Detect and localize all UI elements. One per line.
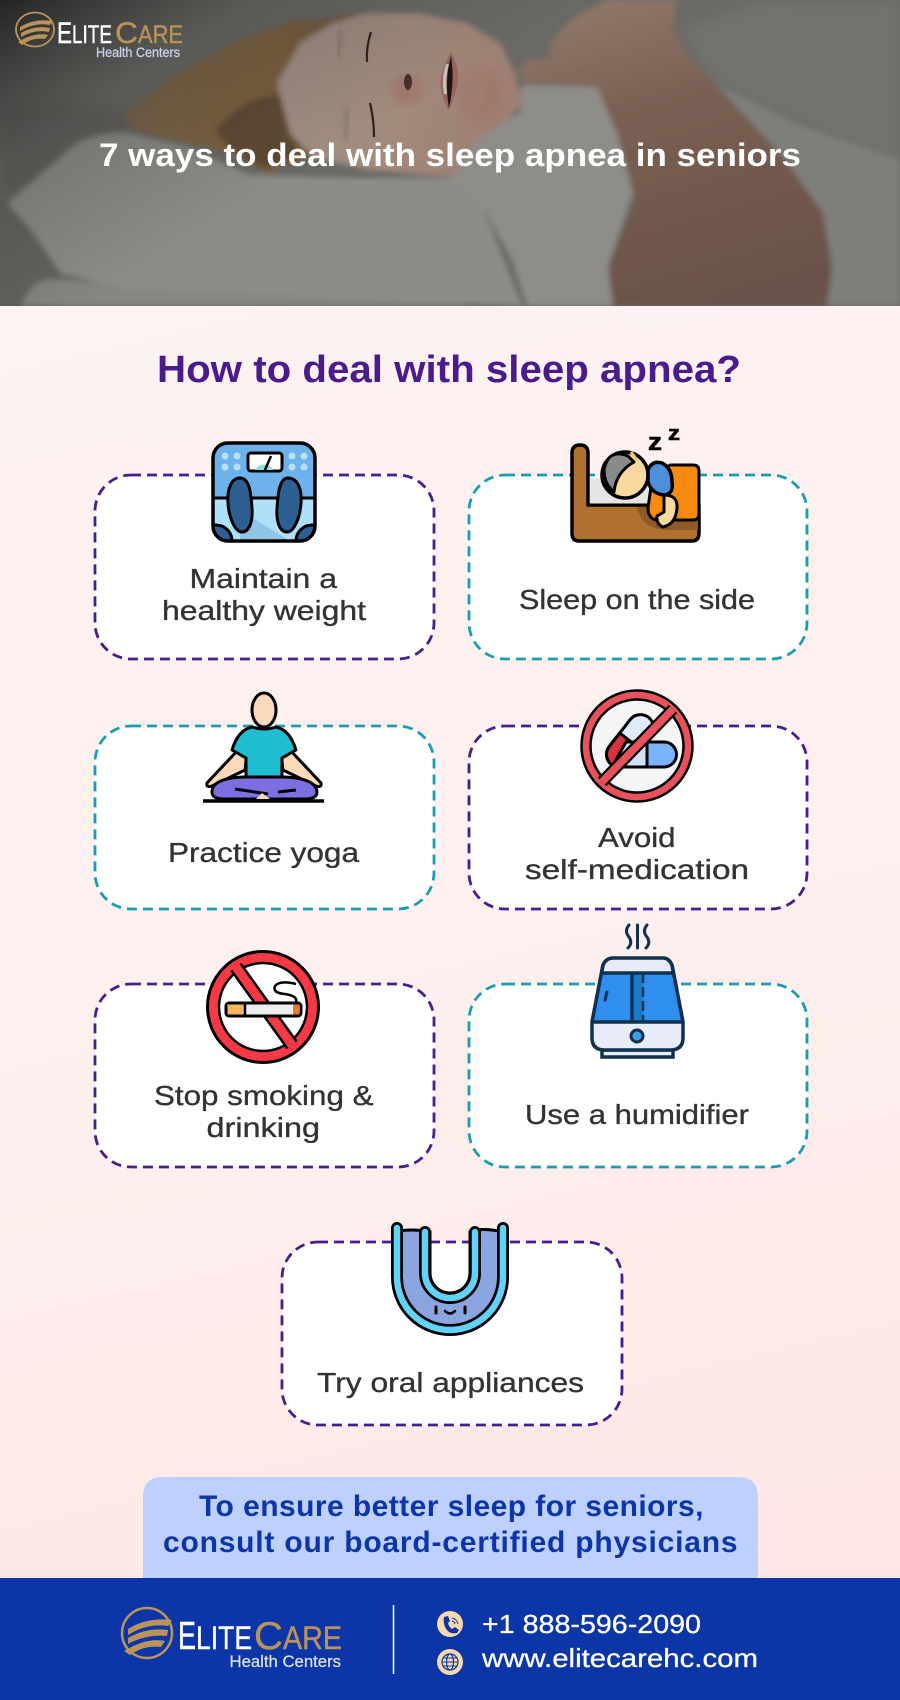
label: maintain a healthy weight <box>162 563 366 626</box>
icon: mouth guard <box>396 1228 504 1331</box>
icon: bathroom scale <box>211 441 317 543</box>
label: stop smoking and drinking: drinking <box>206 1112 320 1143</box>
logo: Elite Care header: ARE <box>138 21 183 49</box>
heading: How to deal with sleep apnea? <box>157 349 741 391</box>
panel: stop smoking and drinking <box>95 952 434 1167</box>
title: 7 ways to deal with sleep apnea in seniors <box>99 137 801 173</box>
logo: Elite Care footer: LITE <box>196 1620 252 1656</box>
panel: practice yoga <box>95 693 434 909</box>
label: stop smoking and drinking: Stop smoking & <box>154 1080 374 1111</box>
logo: Elite Care header: C <box>115 17 138 50</box>
logo: Elite Care footer: Health Centers <box>230 1652 341 1671</box>
label: stop smoking and drinking <box>154 1080 374 1143</box>
hero photo: senior sleeping with open mouth <box>0 0 900 306</box>
icon: person sleeping on side <box>572 423 699 541</box>
footer <box>0 1578 900 1700</box>
icon: phone <box>437 1611 463 1637</box>
logo: Elite Care footer: ARE <box>283 1620 342 1656</box>
panel: use a humidifier <box>469 925 807 1167</box>
icon: humidifier <box>592 925 683 1057</box>
icon: person sleeping on side: z <box>668 423 680 445</box>
panel: maintain a healthy weight <box>95 443 434 659</box>
label: avoid self-medication: self-medication <box>525 854 749 885</box>
logo: Elite Care footer <box>122 1608 342 1671</box>
label: avoid self-medication: Avoid <box>598 822 676 853</box>
label: avoid self-medication <box>525 822 749 885</box>
callout: consult physicians <box>143 1477 758 1578</box>
callout: consult physicians: consult our board-certified physicians <box>163 1526 738 1559</box>
icon: globe <box>437 1649 463 1675</box>
panel: try oral appliances <box>282 1228 622 1425</box>
icon: prohibited pills <box>582 690 692 802</box>
icon: no smoking <box>208 952 318 1062</box>
logo: Elite Care footer: C <box>254 1615 283 1658</box>
label: practice yoga: Practice yoga <box>168 837 359 868</box>
logo: Elite Care header: Health Centers <box>96 44 180 60</box>
logo: Elite Care header <box>16 12 183 60</box>
text: phone number: +1 888-596-2090 <box>482 1609 701 1639</box>
panel: sleep on the side <box>469 423 807 659</box>
logo: Elite Care header: LITE <box>72 21 112 49</box>
label: use a humidifier: Use a humidifier <box>525 1099 749 1130</box>
logo: Elite Care header: E <box>57 17 72 50</box>
label: maintain a healthy weight: Maintain a <box>190 563 337 594</box>
label: try oral appliances: Try oral appliances <box>317 1367 584 1398</box>
panel: avoid self-medication <box>469 690 807 909</box>
callout: consult physicians: To ensure better sleep for seniors, <box>199 1490 704 1523</box>
icon: person in lotus pose <box>203 693 324 801</box>
icon: person sleeping on side: z <box>648 429 662 456</box>
label: maintain a healthy weight: healthy weight <box>162 595 366 626</box>
text: website: www.elitecarehc.com <box>481 1643 758 1673</box>
label: sleep on the side: Sleep on the side <box>519 584 755 615</box>
logo: Elite Care footer: E <box>178 1615 196 1658</box>
